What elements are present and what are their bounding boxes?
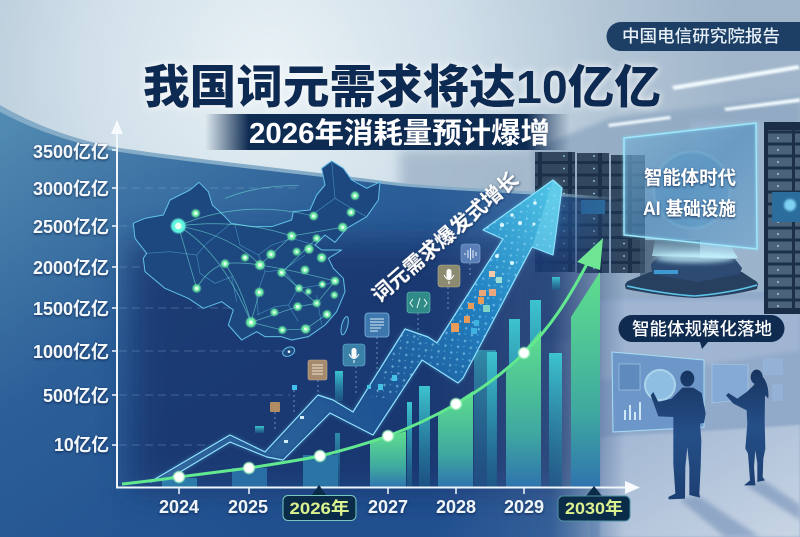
green growth curve with arrow [122, 238, 603, 484]
bar 2026 [303, 455, 338, 487]
silhouette: man [651, 371, 706, 499]
x axis labels: 2028 [436, 497, 476, 517]
y axis labels: 1000亿亿 [33, 342, 109, 362]
y axis labels: 1500亿亿 [33, 299, 109, 319]
y axis labels: 10亿亿 [54, 435, 109, 455]
Taiwan island [339, 316, 350, 335]
bar 2030 [571, 272, 600, 487]
bar 2028 [438, 391, 473, 487]
x axis labels: 2029 [504, 497, 544, 517]
bar 2027 [370, 431, 406, 487]
y axis labels: 2500亿亿 [33, 217, 109, 237]
speech bubble: 智能体规模化落地 [618, 315, 784, 349]
highlights on arrow head [495, 201, 537, 265]
highlighted year: 2026年 [283, 485, 356, 520]
silhouette: woman [726, 370, 768, 485]
diagonal label: 词元需求爆发式增长: 词元需求爆发式增长 [368, 168, 523, 307]
chart axes [111, 120, 640, 494]
main title: 我国词元需求将达10亿亿 [143, 61, 661, 113]
map of China with data links [133, 161, 380, 358]
horizontal grid lines [119, 188, 300, 445]
data links [178, 186, 343, 330]
hologram pedestal [625, 240, 758, 298]
data chips on arrow [284, 271, 502, 443]
x axis labels: 2027 [368, 497, 408, 517]
source tag: 中国电信研究院报告: 中国电信研究院报告 [622, 26, 780, 46]
bar 2025 [232, 468, 267, 487]
icon: brown document [308, 360, 327, 380]
bars by year [162, 272, 600, 487]
stems [275, 263, 470, 432]
x axis labels [159, 497, 544, 517]
background thin bars [255, 277, 562, 487]
icon: small box [270, 402, 280, 412]
highlighted year: 2030年: 2030年 [565, 498, 623, 518]
icon: small square [292, 385, 297, 390]
map landmass [133, 161, 380, 340]
y axis labels: 2000亿亿 [33, 258, 109, 278]
map outer glow [133, 161, 380, 340]
highlighted year: 2026年: 2026年 [290, 498, 350, 518]
hologram panel [624, 123, 757, 249]
city cores [175, 194, 357, 353]
floating data icons [270, 244, 480, 432]
source tag: 中国电信研究院报告 [606, 22, 800, 51]
hologram title line 1: 智能体时代 [644, 167, 736, 189]
icon: olive microphone [438, 265, 460, 287]
speech bubble: 智能体规模化落地: 智能体规模化落地 [632, 319, 772, 339]
holographic wall screens [612, 352, 783, 432]
bar 2024 [162, 478, 197, 487]
x axis labels: 2025 [228, 497, 268, 517]
bar 2029 [506, 330, 541, 487]
year markers [174, 348, 530, 482]
icon: teal microphone [343, 344, 365, 366]
y axis labels: 3500亿亿 [33, 142, 109, 162]
server racks: centre row [535, 152, 700, 285]
city glow [171, 192, 359, 334]
y axis labels: 3000亿亿 [33, 179, 109, 199]
chart background panel [0, 105, 640, 537]
highlighted year: 2030年 [558, 486, 630, 521]
person shadows [680, 480, 800, 537]
y axis labels [33, 142, 109, 455]
blue zig-zag growth arrow [150, 180, 562, 482]
Hainan island [281, 345, 296, 358]
subtitle banner: 2026年消耗量预计爆增 [249, 117, 550, 150]
icon: blue document [365, 313, 389, 337]
icon: code [407, 292, 430, 313]
server rack: right [764, 122, 800, 314]
province borders [147, 161, 367, 325]
x axis labels: 2024 [159, 497, 199, 517]
ceiling lights [608, 65, 800, 127]
hologram title line 2: AI 基础设施 [643, 198, 736, 220]
y axis labels: 500亿亿 [43, 386, 109, 406]
icon: audio wave [461, 244, 480, 263]
